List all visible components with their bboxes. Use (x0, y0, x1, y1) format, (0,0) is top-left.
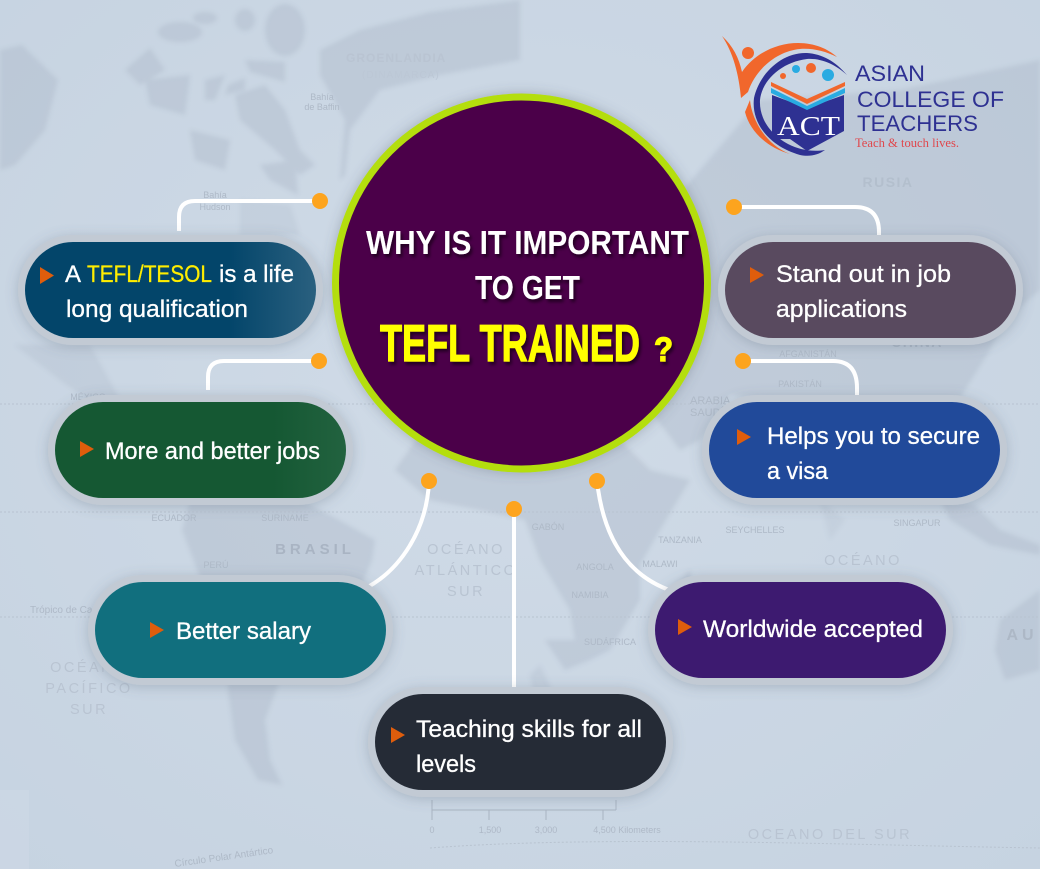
background: world map: AU (1006, 627, 1038, 644)
panel: helps secure a visa: a visa (767, 458, 828, 485)
connector lines and dots (179, 193, 879, 696)
panel: stand out in job applications (718, 235, 1023, 345)
background: world map: GROENLANDIA (346, 51, 446, 65)
icon: logo emblem (722, 36, 847, 156)
background: world map: PERÚ (203, 560, 229, 570)
logo wordmark (855, 61, 1004, 136)
panel: more and better jobs: More and better jobs (105, 438, 320, 465)
background: world map: SUR (70, 702, 108, 718)
background: world map: 3,000 (535, 825, 557, 835)
background: world map: 1,500 (479, 825, 501, 835)
title: why is it important to get: WHY IS IT IMPORTANT (366, 224, 689, 261)
background: world map: de Baffin (304, 102, 340, 112)
background: world map: OCÉANO (824, 552, 902, 569)
background: world map: BRASIL (275, 541, 355, 558)
background: world map: (DINAMARCA) (362, 70, 440, 81)
background: world map: OCEANO DEL SUR (748, 827, 912, 843)
title: why is it important to get (366, 224, 689, 306)
logo wordmark: TEACHERS (857, 111, 978, 136)
panel: life long qualification: is a life (219, 261, 294, 288)
background: world map: NAMIBIA (571, 590, 609, 600)
panel: worldwide accepted: Worldwide accepted (703, 616, 923, 643)
background: world map: SUR (447, 584, 485, 600)
background: world map: MÉXICO (70, 392, 106, 402)
background: world map: ARABIA (690, 395, 731, 407)
logo tagline: Teach & touch lives. (855, 135, 959, 150)
panel: stand out in job applications: applications (776, 296, 907, 323)
title: TEFL trained: TEFL TRAINED (380, 315, 640, 373)
background: world map: ECUADOR (151, 513, 197, 523)
panel: helps secure a visa (702, 395, 1007, 505)
panel: life long qualification: long qualification (66, 296, 248, 323)
logo wordmark: ASIAN (855, 61, 925, 86)
panel: better salary (88, 575, 393, 685)
background: world map: Trópico de Capricornio (30, 605, 131, 616)
logo: Asian College of Teachers (722, 36, 1004, 156)
panel: stand out in job applications: Stand out in job (776, 261, 951, 288)
background: world map: Hudson (199, 202, 231, 212)
background: world map: CHINA (891, 334, 943, 350)
background: world map: ATLÁNTICO (415, 562, 517, 579)
background: world map: 4,500 Kilometers (593, 825, 661, 835)
icon: logo emblem: ACT (777, 111, 841, 141)
panel: helps secure a visa: Helps you to secure (767, 423, 980, 450)
logo wordmark: COLLEGE OF (857, 87, 1004, 112)
background: world map: 0 (429, 825, 435, 835)
panel: life long qualification: A (65, 261, 82, 288)
background: world map: Bahía (203, 190, 227, 200)
title: why is it important to get: TO GET (475, 269, 580, 306)
panel: teaching skills: levels (416, 751, 476, 778)
background: world map: SEYCHELLES (725, 525, 785, 535)
panel: worldwide accepted (648, 575, 953, 685)
panel: teaching skills (368, 687, 673, 797)
panel: better salary: Better salary (176, 618, 312, 645)
background: world map: SAUDÍ (690, 406, 725, 419)
background: world map: SUDÁFRICA (584, 637, 636, 647)
background: world map: AFGANISTÁN (779, 349, 837, 359)
panel: teaching skills: Teaching skills for all (416, 716, 642, 743)
background: world map: PAKISTÁN (778, 379, 822, 389)
background: world map: GABÓN (532, 522, 564, 532)
central circle (336, 97, 708, 469)
background: world map: SURINAME (261, 513, 309, 523)
background: world map: OCÉANO (50, 659, 128, 676)
background: world map: ANGOLA (576, 562, 614, 572)
background: world map: RUSIA (862, 174, 914, 190)
background: world map: SINGAPUR (893, 518, 941, 528)
background: world map: TANZANIA (658, 535, 702, 545)
panel: life long qualification: TEFL/TESOL (87, 261, 212, 288)
panel: more and better jobs (48, 395, 353, 505)
background: world map: OCÉANO (427, 541, 505, 558)
background: world map: PACÍFICO (45, 680, 133, 697)
panel: life long qualification (18, 235, 323, 345)
title: TEFL trained: ? (654, 331, 673, 369)
background: world map: MALAWI (642, 559, 678, 569)
background: world map: Bahía (310, 92, 334, 102)
